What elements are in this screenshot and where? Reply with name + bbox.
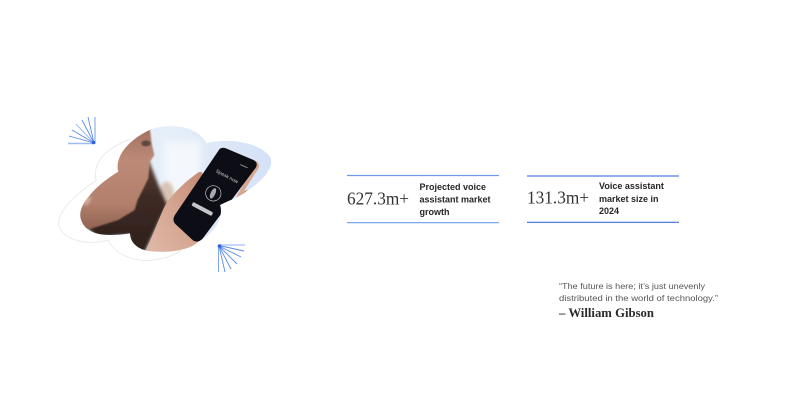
phone screen button	[191, 202, 213, 216]
cloud-shaped photo: person holding a phone	[80, 126, 271, 252]
phone body	[173, 148, 257, 242]
stat value: 131.3m+	[527, 188, 589, 208]
icon: top-left ray burst	[68, 117, 95, 144]
stat label: Voice assistant	[599, 181, 664, 191]
stat value: 627.3m+	[347, 188, 409, 208]
stat: projected market growth	[347, 176, 499, 223]
quote attribution: – William Gibson	[558, 306, 654, 320]
phone edge	[236, 158, 259, 199]
stat label: Projected voice	[420, 182, 486, 192]
stat label: growth	[420, 207, 450, 217]
face	[80, 130, 155, 230]
photo background	[80, 126, 271, 250]
bright window	[165, 142, 200, 192]
eye shadow	[141, 140, 151, 146]
dark hair and clothing	[85, 160, 167, 252]
quote: distributed in the world of technology.”	[559, 293, 718, 303]
stat label: 2024	[599, 206, 619, 216]
phone screen prompt: Speak now	[214, 168, 239, 186]
decorative cloud outline	[59, 139, 182, 260]
quote	[558, 281, 718, 320]
microphone glyph	[210, 188, 216, 199]
tan blur behind shoulder	[159, 182, 174, 208]
quote: “The future is here; it’s just unevenly	[559, 281, 706, 291]
microphone ring	[206, 186, 221, 201]
stat: market size in 2024	[527, 176, 679, 222]
hand and wrist	[144, 172, 203, 257]
stat label: assistant market	[420, 194, 491, 204]
icon: bottom-right ray burst	[218, 244, 245, 272]
thumb	[236, 190, 249, 198]
phone status bar	[240, 164, 248, 168]
stat label: market size in	[599, 194, 659, 204]
highlight on cheek	[83, 195, 92, 206]
